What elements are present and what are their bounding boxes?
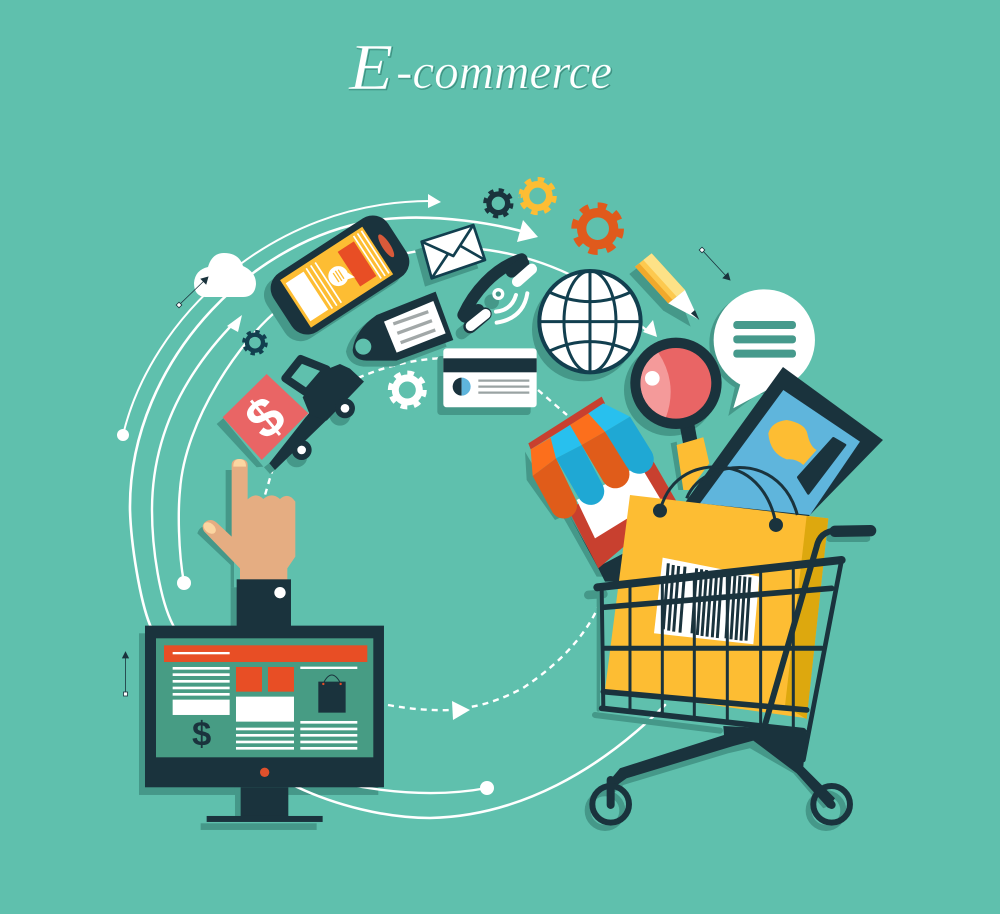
monitor shadow bbox=[139, 633, 378, 830]
icon: magnifying glass bbox=[624, 338, 722, 490]
truck cab bbox=[303, 364, 364, 421]
phone body bbox=[264, 208, 416, 342]
title: E bbox=[348, 31, 393, 104]
right column with bag bbox=[300, 667, 357, 750]
icon: gears cluster bbox=[485, 179, 621, 252]
thin arrow markers bbox=[122, 247, 730, 696]
cart shadow bbox=[588, 538, 867, 828]
truck bed bbox=[269, 413, 327, 470]
title bbox=[348, 31, 612, 104]
icon: small dark gear bbox=[244, 331, 266, 354]
truck shadow bbox=[217, 418, 263, 467]
sleeve bbox=[237, 579, 291, 628]
dashed ring bbox=[265, 358, 600, 710]
thin arrow: left of monitor bbox=[122, 652, 128, 696]
monitor body bbox=[145, 626, 384, 787]
icon: delivery truck bbox=[217, 359, 364, 474]
arc: large ring bbox=[130, 218, 665, 818]
barcode bbox=[654, 558, 759, 644]
icon: white gear bbox=[390, 373, 425, 407]
screen header bbox=[164, 645, 367, 662]
cart wheels bbox=[592, 780, 850, 823]
hand shadow bbox=[197, 470, 234, 587]
shopping bag bbox=[605, 467, 828, 719]
leg shadow bbox=[603, 740, 832, 808]
arc: middle ring with dot bbox=[152, 327, 487, 793]
power light bbox=[260, 768, 269, 777]
stand bbox=[241, 787, 288, 817]
phone shadow bbox=[257, 215, 410, 348]
cuff button bbox=[274, 587, 286, 598]
icon: telephone handset bbox=[462, 259, 532, 333]
gear: yellow bbox=[521, 179, 555, 213]
thin arrow: right bbox=[699, 247, 730, 280]
arc: outer with dot bbox=[123, 201, 430, 435]
price box bbox=[223, 374, 308, 460]
monitor bbox=[145, 626, 384, 822]
hand skin bbox=[203, 459, 295, 580]
screen bbox=[156, 638, 373, 757]
bag handles bbox=[660, 467, 797, 525]
gear: dark bbox=[485, 190, 512, 217]
icon: speech bubble bbox=[709, 289, 815, 416]
gear: orange bbox=[574, 205, 621, 252]
cart basket bbox=[597, 531, 871, 760]
nails bbox=[233, 459, 246, 467]
cart base and legs bbox=[607, 726, 835, 808]
circular arcs bbox=[123, 201, 665, 818]
icon: tag bbox=[346, 292, 453, 367]
arc dots and arrowheads bbox=[117, 194, 657, 795]
awning stripes bbox=[531, 403, 654, 519]
icon: globe bbox=[532, 271, 641, 381]
dollar sign: $ bbox=[233, 384, 297, 451]
screen dollar sign: $ bbox=[192, 716, 211, 754]
thin arrow: cloud bbox=[176, 277, 208, 308]
wheels bbox=[335, 398, 355, 418]
icon: tablet bbox=[683, 367, 883, 518]
middle column bbox=[236, 667, 294, 750]
title: -commerce bbox=[396, 43, 612, 99]
left column bbox=[173, 667, 230, 715]
icon: smartphone bbox=[257, 208, 416, 348]
icon: envelope bbox=[415, 225, 485, 287]
shopping cart and bag bbox=[588, 467, 871, 828]
hand bbox=[197, 459, 295, 628]
arc: inner with dot bbox=[179, 248, 650, 583]
icon: storefront bbox=[525, 397, 677, 582]
icon: credit card bbox=[437, 348, 537, 415]
icon: pencil bbox=[629, 253, 699, 327]
icon: cloud bbox=[194, 253, 256, 297]
